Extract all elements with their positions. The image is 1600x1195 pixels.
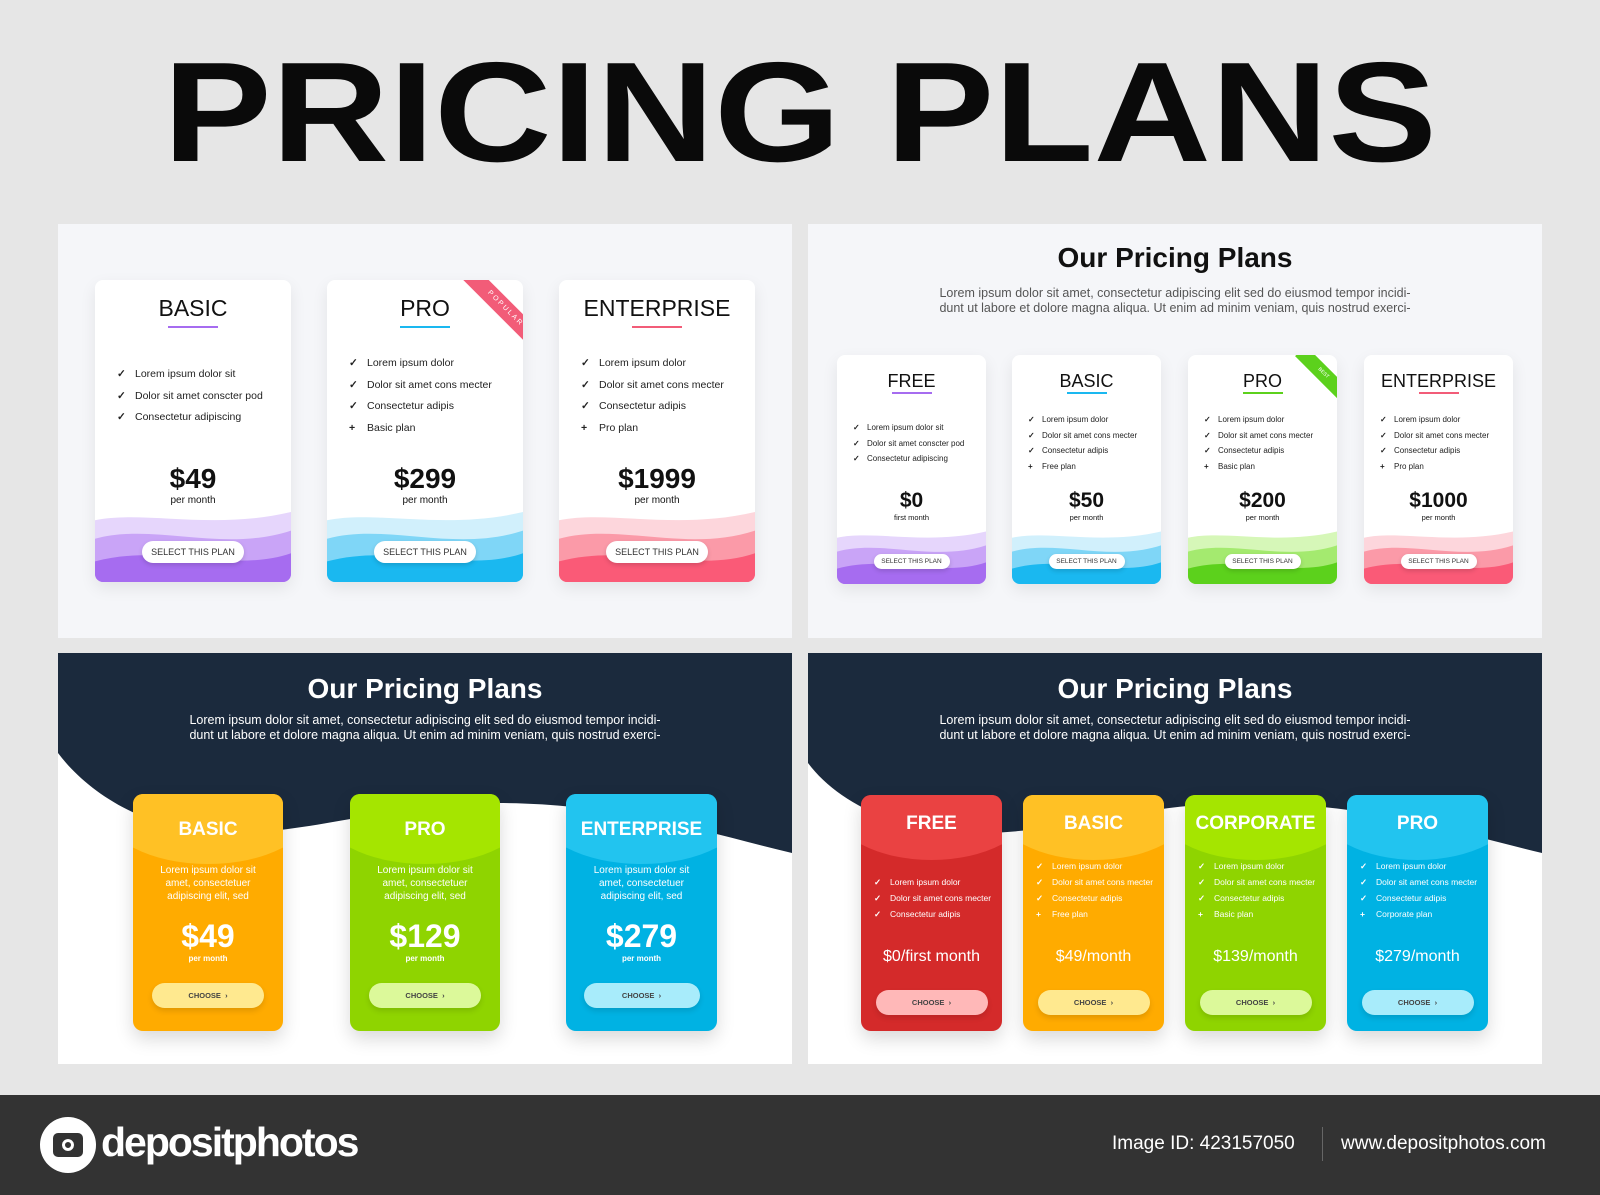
subtitle: dunt ut labore et dolore magna aliqua. Ut enim ad minim veniam, quis nostrud exerci-: [939, 728, 1411, 742]
card: pro: CHOOSE ›: [1398, 998, 1437, 1007]
card: basic: Dolor sit amet cons mecter: [1052, 877, 1153, 887]
card: enterprise: SELECT THIS PLAN: [615, 547, 699, 557]
card: pro: Consectetur adipis: [1376, 893, 1446, 903]
card: basic: ✓: [1028, 446, 1035, 455]
card: pro: Dolor sit amet cons mecter: [367, 378, 492, 390]
card: basic: +: [1036, 909, 1041, 919]
card: pro: Basic plan: [367, 422, 415, 434]
card: basic: $49: [181, 918, 235, 954]
card: basic: Free plan: [1052, 909, 1088, 919]
card: basic: Dolor sit amet cons mecter: [1042, 430, 1137, 440]
card: pro: Basic plan: [1218, 462, 1255, 470]
card: corporate: Basic plan: [1214, 909, 1253, 919]
card: pro: Dolor sit amet cons mecter: [1376, 877, 1477, 887]
card: free: $0: [900, 489, 923, 512]
icon: camera logo: [40, 1117, 96, 1173]
subtitle: [939, 286, 1411, 315]
subtitle: dunt ut labore et dolore magna aliqua. Ut enim ad minim veniam, quis nostrud exerci-: [939, 301, 1411, 315]
card: pro: $200: [1239, 489, 1286, 512]
card: corporate: CHOOSE ›: [1236, 998, 1275, 1007]
brand name: depositphotos: [101, 1119, 357, 1165]
heading: Our Pricing Plans: [1058, 673, 1292, 704]
card: pro: +: [349, 422, 355, 434]
card: enterprise: [1364, 355, 1513, 584]
card: basic: $49/month: [1056, 948, 1131, 965]
card: enterprise: Consectetur adipis: [599, 400, 686, 412]
card: enterprise: ✓: [1380, 430, 1387, 440]
card: basic: BASIC: [158, 295, 228, 321]
card: basic: $50: [1069, 489, 1104, 512]
panel: light three-card pricing: [58, 224, 792, 638]
card: basic: [133, 794, 283, 1031]
card: free: FREE: [906, 813, 957, 834]
panel: light four-card pricing: [808, 224, 1542, 638]
card: pro: Consectetur adipis: [1218, 446, 1284, 455]
card: free: Consectetur adipiscing: [867, 454, 948, 463]
card: pro: ✓: [1360, 877, 1367, 887]
card: pro: $129: [389, 918, 461, 954]
footer bar: [0, 1095, 1600, 1195]
card: basic: BASIC: [178, 819, 238, 840]
card: free: $0/first month: [883, 948, 980, 965]
card: free: CHOOSE ›: [912, 998, 951, 1007]
card: pro: [327, 280, 523, 582]
ribbon: best choice: [1295, 346, 1351, 401]
card: pro: ✓: [1360, 861, 1367, 871]
panel: dark four-card pricing: [808, 653, 1542, 1064]
card: pro: ✓: [1204, 415, 1211, 424]
card: enterprise: ✓: [1380, 415, 1387, 424]
card: pro: adipiscing elit, sed: [384, 891, 466, 902]
card: enterprise: Dolor sit amet cons mecter: [1394, 430, 1489, 440]
card: pro: CHOOSE ›: [405, 991, 445, 1000]
card: free: Lorem ipsum dolor sit: [867, 423, 943, 432]
card: enterprise: ✓: [581, 400, 590, 412]
card: enterprise: Pro plan: [599, 422, 638, 434]
card: pro: [1347, 795, 1488, 1031]
card: basic: ✓: [1028, 430, 1035, 440]
card: pro: SELECT THIS PLAN: [1232, 558, 1293, 565]
card: basic: Lorem ipsum dolor sit: [135, 368, 235, 380]
ribbon: best choice: BEST: [1317, 366, 1330, 380]
card: basic: ✓: [1036, 877, 1043, 887]
card: enterprise: ENTERPRISE: [584, 295, 730, 321]
card: basic: Consectetur adipis: [1042, 446, 1108, 455]
card: basic: Dolor sit amet conscter pod: [135, 390, 263, 402]
card: pro: +: [1360, 909, 1365, 919]
card: basic: ✓: [1036, 861, 1043, 871]
card: basic: per month: [188, 954, 228, 963]
heading: Our Pricing Plans: [308, 673, 542, 704]
card: pro: per month: [405, 954, 445, 963]
card: enterprise: adipiscing elit, sed: [601, 891, 682, 902]
card: enterprise: per month: [1422, 513, 1455, 522]
card: pro: PRO: [1243, 371, 1282, 391]
card: basic: per month: [1070, 513, 1103, 522]
card: pro: Lorem ipsum dolor: [1218, 415, 1284, 424]
card: enterprise: [559, 280, 755, 582]
card: pro: [350, 794, 500, 1031]
subtitle: Lorem ipsum dolor sit amet, consectetur adipiscing elit sed do eiusmod tempor incidi-: [939, 713, 1411, 727]
card: basic: Lorem ipsum dolor: [1052, 861, 1122, 871]
subtitle: Lorem ipsum dolor sit amet, consectetur adipiscing elit sed do eiusmod tempor incidi-: [939, 286, 1411, 300]
image id: Image ID: 423157050: [1112, 1133, 1295, 1154]
card: free: ✓: [874, 909, 881, 919]
card: pro: amet, consectetuer: [382, 878, 468, 889]
card: enterprise: Lorem ipsum dolor: [1394, 415, 1460, 424]
card: basic: Consectetur adipis: [1052, 893, 1122, 903]
card: basic: ✓: [1028, 415, 1035, 424]
card: pro: ✓: [1360, 893, 1367, 903]
card: pro: Lorem ipsum dolor sit: [377, 865, 473, 876]
card: enterprise: Pro plan: [1394, 462, 1424, 470]
card: enterprise: $1000: [1409, 489, 1468, 512]
card: free: Consectetur adipis: [890, 909, 960, 919]
heading: Our Pricing Plans: [1058, 242, 1292, 273]
card: free: Lorem ipsum dolor: [890, 877, 960, 887]
card: basic: ✓: [1036, 893, 1043, 903]
card: free: [861, 795, 1002, 1031]
card: pro: Lorem ipsum dolor: [1376, 861, 1446, 871]
card: enterprise: ENTERPRISE: [581, 819, 702, 840]
title: PRICING PLANS: [163, 33, 1437, 192]
card: basic: CHOOSE ›: [1074, 998, 1113, 1007]
card: free: SELECT THIS PLAN: [881, 558, 942, 565]
card: basic: SELECT THIS PLAN: [1056, 558, 1117, 565]
card: corporate: +: [1198, 909, 1203, 919]
card: enterprise: ✓: [581, 378, 590, 390]
card: free: ✓: [874, 893, 881, 903]
card: basic: Consectetur adipiscing: [135, 411, 241, 423]
card: enterprise: per month: [622, 954, 661, 963]
card: basic: [95, 280, 291, 582]
card: enterprise: $1999: [618, 463, 696, 494]
card: free: FREE: [887, 371, 936, 391]
card: enterprise: ENTERPRISE: [1381, 371, 1496, 391]
card: basic: [1023, 795, 1164, 1031]
card: enterprise: +: [581, 422, 587, 434]
card: enterprise: Consectetur adipis: [1394, 446, 1460, 455]
card: free: [837, 355, 986, 584]
card: pro: ✓: [1204, 446, 1211, 455]
card: enterprise: SELECT THIS PLAN: [1408, 558, 1469, 565]
ribbon: popular: [463, 267, 547, 351]
card: pro: ✓: [349, 378, 358, 390]
card: corporate: Consectetur adipis: [1214, 893, 1284, 903]
card: basic: BASIC: [1064, 813, 1123, 834]
card: pro: PRO: [1397, 813, 1438, 834]
card: basic: CHOOSE ›: [188, 991, 228, 1000]
card: pro: per month: [402, 495, 448, 506]
subtitle: dunt ut labore et dolore magna aliqua. Ut enim ad minim veniam, quis nostrud exerci-: [189, 728, 661, 742]
card: corporate: $139/month: [1213, 948, 1298, 965]
card: pro: [1188, 355, 1337, 584]
card: basic: ✓: [117, 390, 126, 402]
card: corporate: ✓: [1198, 893, 1205, 903]
card: pro: Dolor sit amet cons mecter: [1218, 430, 1313, 440]
subtitle: [939, 713, 1411, 742]
card: basic: BASIC: [1059, 371, 1114, 391]
card: enterprise: [566, 794, 717, 1031]
card: free: ✓: [874, 877, 881, 887]
card: pro: Consectetur adipis: [367, 400, 454, 412]
card: enterprise: Dolor sit amet cons mecter: [599, 378, 724, 390]
card: enterprise: CHOOSE ›: [622, 991, 661, 1000]
card: basic: $49: [170, 463, 216, 494]
card: corporate: ✓: [1198, 877, 1205, 887]
card: pro: PRO: [400, 295, 450, 321]
subtitle: Lorem ipsum dolor sit amet, consectetur adipiscing elit sed do eiusmod tempor incidi-: [189, 713, 661, 727]
card: basic: amet, consectetuer: [165, 878, 251, 889]
card: pro: $279/month: [1375, 948, 1460, 965]
card: free: ✓: [853, 454, 860, 463]
card: pro: ✓: [349, 400, 358, 412]
card: free: ✓: [853, 438, 860, 448]
card: basic: +: [1028, 462, 1033, 470]
card: corporate: Lorem ipsum dolor: [1214, 861, 1284, 871]
card: free: first month: [894, 513, 929, 522]
card: enterprise: ✓: [581, 357, 590, 369]
website url: www.depositphotos.com: [1341, 1133, 1546, 1154]
card: enterprise: $279: [606, 918, 677, 954]
card: basic: ✓: [117, 368, 126, 380]
card: basic: Lorem ipsum dolor: [1042, 415, 1108, 424]
card: corporate: [1185, 795, 1326, 1031]
subtitle: [189, 713, 661, 742]
card: enterprise: Lorem ipsum dolor: [599, 357, 686, 369]
card: enterprise: ✓: [1380, 446, 1387, 455]
card: basic: ✓: [117, 411, 126, 423]
card: basic: adipiscing elit, sed: [167, 891, 249, 902]
card: basic: per month: [170, 495, 216, 506]
card: basic: SELECT THIS PLAN: [151, 547, 235, 557]
card: pro: Corporate plan: [1376, 909, 1432, 919]
card: enterprise: amet, consectetuer: [599, 878, 684, 889]
card: basic: [1012, 355, 1161, 584]
card: enterprise: per month: [634, 495, 680, 506]
card: free: Dolor sit amet conscter pod: [867, 438, 964, 448]
card: basic: Free plan: [1042, 462, 1076, 470]
card: free: Dolor sit amet cons mecter: [890, 893, 991, 903]
card: pro: ✓: [1204, 430, 1211, 440]
card: enterprise: +: [1380, 462, 1385, 470]
card: pro: Lorem ipsum dolor: [367, 357, 454, 369]
card: free: ✓: [853, 423, 860, 432]
card: pro: +: [1204, 462, 1209, 470]
card: corporate: ✓: [1198, 861, 1205, 871]
card: corporate: CORPORATE: [1196, 813, 1315, 834]
panel: dark three-card pricing: [58, 653, 792, 1064]
card: corporate: Dolor sit amet cons mecter: [1214, 877, 1315, 887]
card: pro: per month: [1246, 513, 1279, 522]
card: pro: $299: [394, 463, 456, 494]
card: enterprise: Lorem ipsum dolor sit: [594, 865, 689, 876]
card: pro: SELECT THIS PLAN: [383, 547, 467, 557]
card: pro: PRO: [404, 819, 446, 840]
card: pro: ✓: [349, 357, 358, 369]
card: basic: Lorem ipsum dolor sit: [160, 865, 256, 876]
